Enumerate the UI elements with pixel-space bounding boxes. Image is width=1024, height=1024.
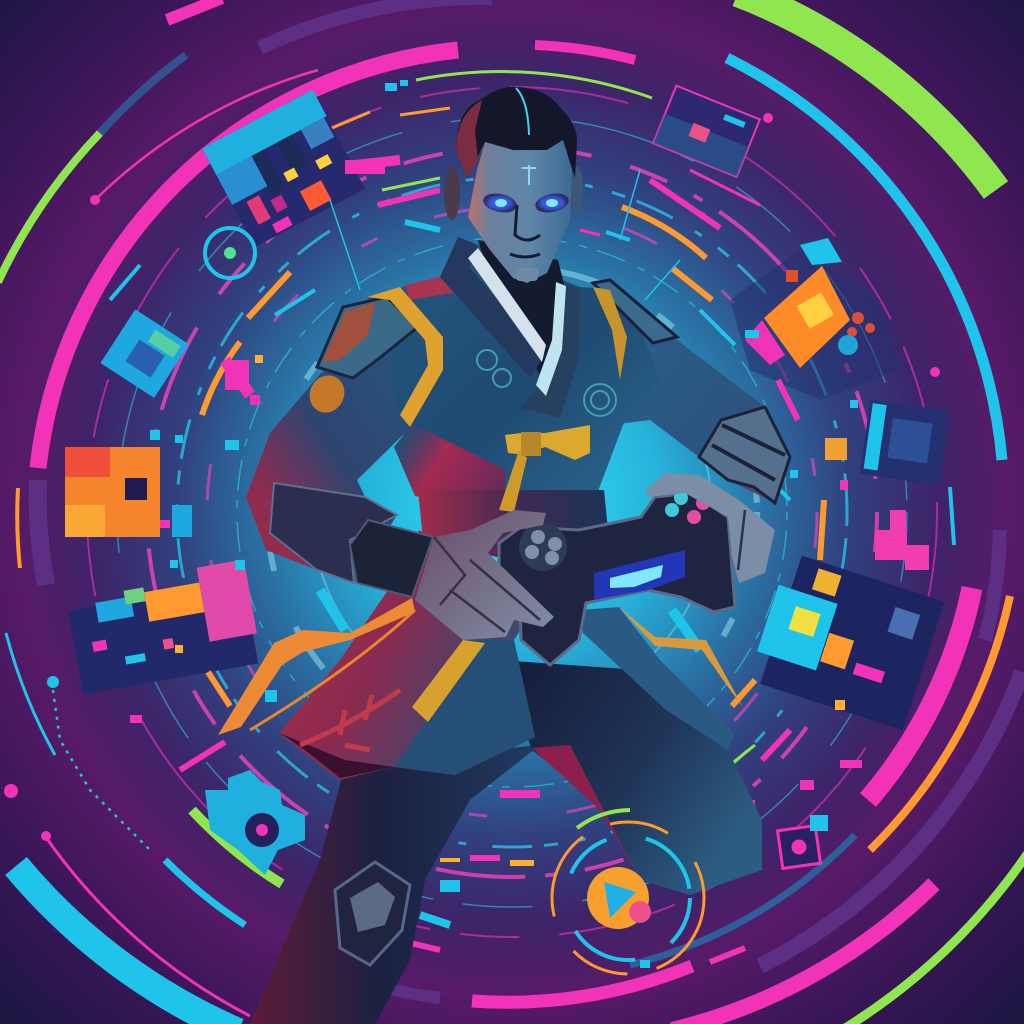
arc: purple bottom right (760, 672, 1022, 966)
right sleeve (625, 300, 790, 503)
knee plate (350, 882, 395, 932)
arc: green top right (738, 0, 996, 190)
back leg (250, 745, 540, 1024)
shoulder pad left (317, 297, 418, 378)
fragment: dotted line (53, 690, 150, 850)
skirt (279, 530, 540, 780)
fragment: magenta ticks (180, 160, 798, 962)
face (468, 140, 572, 283)
front leg (500, 660, 762, 895)
arc: cyan thick bottom left (16, 866, 238, 1024)
arc: magenta thin bottom left (45, 836, 250, 1016)
panel: left orange pixel block (65, 447, 192, 537)
arc: magenta bottom right thick (868, 588, 972, 800)
arc: orange bottom right (870, 596, 1010, 850)
collar white left (468, 248, 546, 362)
panel: left cyan square (100, 309, 189, 398)
screen light (610, 565, 663, 588)
red neck shade (405, 237, 470, 300)
arc: purple right edge (985, 530, 1000, 640)
node dots (4, 113, 940, 841)
icon: right pink pixels (825, 438, 929, 570)
arc: green bottom right (842, 850, 1024, 1024)
collar left lapel (440, 237, 545, 378)
collar right lapel (520, 283, 580, 418)
neck (478, 240, 568, 375)
arc: green left (0, 133, 100, 282)
arc: indigo left top (100, 55, 186, 133)
cuff right band (712, 425, 785, 480)
hud fragments (53, 80, 954, 968)
arc: cyan inner bottom left (165, 860, 245, 925)
strap right (593, 287, 627, 380)
fragment: small magenta pixels (130, 160, 862, 861)
concentric hud rings (87, 87, 937, 937)
cuff right (699, 407, 790, 503)
icon: bottom left pixel gear (205, 770, 305, 875)
skirt blue panel (394, 640, 535, 775)
panel: right pixel burst (730, 238, 900, 400)
d-pad buttons (525, 530, 562, 565)
d-pad (519, 523, 567, 571)
fragment: orange ticks (202, 108, 824, 706)
fragment: green ticks (382, 178, 755, 765)
panel: right lower data card (748, 551, 945, 730)
arc: blue lower right (630, 835, 855, 965)
right skirt panel (580, 607, 734, 750)
panel: right bar card (860, 400, 949, 485)
bow (499, 425, 590, 512)
arc: green thin top (416, 72, 652, 98)
ears (444, 166, 583, 220)
arc: magenta top small (167, 0, 222, 20)
jacket embroidery (477, 350, 616, 416)
eye sockets (482, 191, 570, 215)
arc: purple left (38, 480, 46, 585)
fragment: cyan ticks (110, 170, 954, 925)
panel: left lower data card (65, 559, 262, 694)
torso (367, 237, 660, 509)
arc: magenta bottom center (472, 966, 692, 1002)
icon: play badge (552, 810, 704, 974)
forearm left (350, 520, 433, 597)
controller (499, 491, 735, 665)
arc: magenta top right small (535, 45, 635, 60)
hair red side (456, 100, 482, 178)
hair (456, 87, 577, 178)
panel: top left pixel card (202, 90, 365, 247)
forehead mark (522, 165, 536, 185)
ribbons (218, 598, 743, 735)
emblem (304, 370, 350, 418)
eyes (495, 199, 558, 207)
sash lower (412, 640, 485, 722)
inner leg red (532, 745, 640, 880)
knee guard (335, 862, 410, 965)
arc: magenta bottom (672, 884, 934, 1024)
collar white right (536, 282, 566, 396)
hand right (645, 473, 775, 583)
character (218, 87, 790, 1024)
strap left (367, 287, 443, 427)
arc: magenta thin upper left (95, 70, 318, 200)
leaf pattern (300, 690, 400, 750)
shoulder pad right (593, 280, 677, 343)
skirt dark hem shadow (279, 733, 394, 778)
cuff left (270, 483, 397, 583)
icon: bottom right square (778, 826, 820, 868)
eye glow (487, 196, 565, 210)
hand left (415, 510, 554, 640)
arc: cyan thin left (6, 633, 55, 755)
hair highlight (516, 88, 529, 135)
icon: target circle (205, 228, 255, 278)
arc: green inner bottom left (192, 810, 282, 884)
arc: purple top (260, 0, 492, 48)
arc: cyan right (727, 58, 1002, 460)
torso red shade (394, 420, 505, 509)
panel: top right card (653, 86, 760, 177)
arc: orange left (17, 488, 20, 568)
pad red tint (322, 302, 375, 362)
left sleeve (246, 340, 405, 583)
waist sash (418, 490, 608, 560)
arc: magenta top left (38, 50, 458, 468)
chin plate (516, 268, 538, 281)
screen housing (594, 550, 685, 600)
fragment: small pixels (150, 80, 858, 968)
buttons (665, 491, 710, 524)
fragment: small orange pixels (175, 355, 845, 866)
arc: purple bottom center (362, 982, 440, 998)
nose and mouth (510, 205, 540, 257)
